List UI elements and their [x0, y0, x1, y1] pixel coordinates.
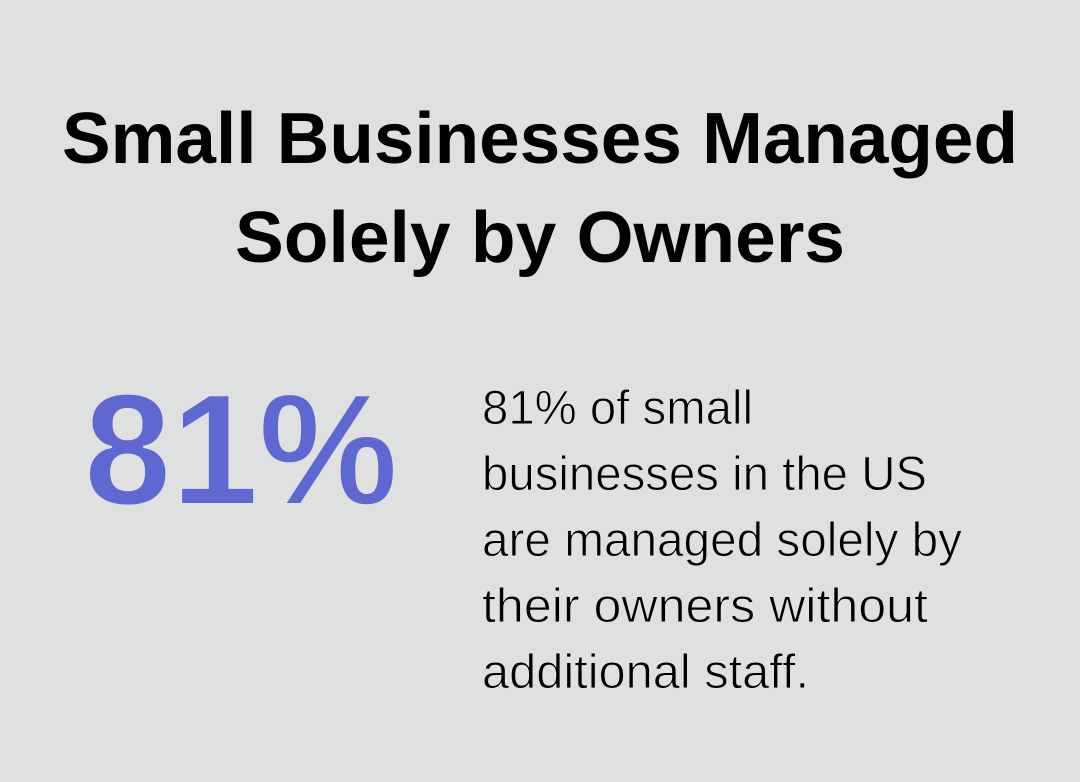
big statistic: 81%: 81%	[84, 362, 398, 538]
description text block: additional staff.	[482, 646, 809, 699]
description text block	[482, 382, 962, 699]
title	[62, 99, 1018, 278]
description text block: are managed solely by	[482, 514, 962, 567]
description text block: their owners without	[482, 580, 928, 633]
title: Small Businesses Managed	[62, 99, 1018, 179]
title: Solely by Owners	[235, 198, 845, 278]
description text block: businesses in the US	[482, 448, 927, 501]
description text block: 81% of small	[482, 382, 753, 435]
